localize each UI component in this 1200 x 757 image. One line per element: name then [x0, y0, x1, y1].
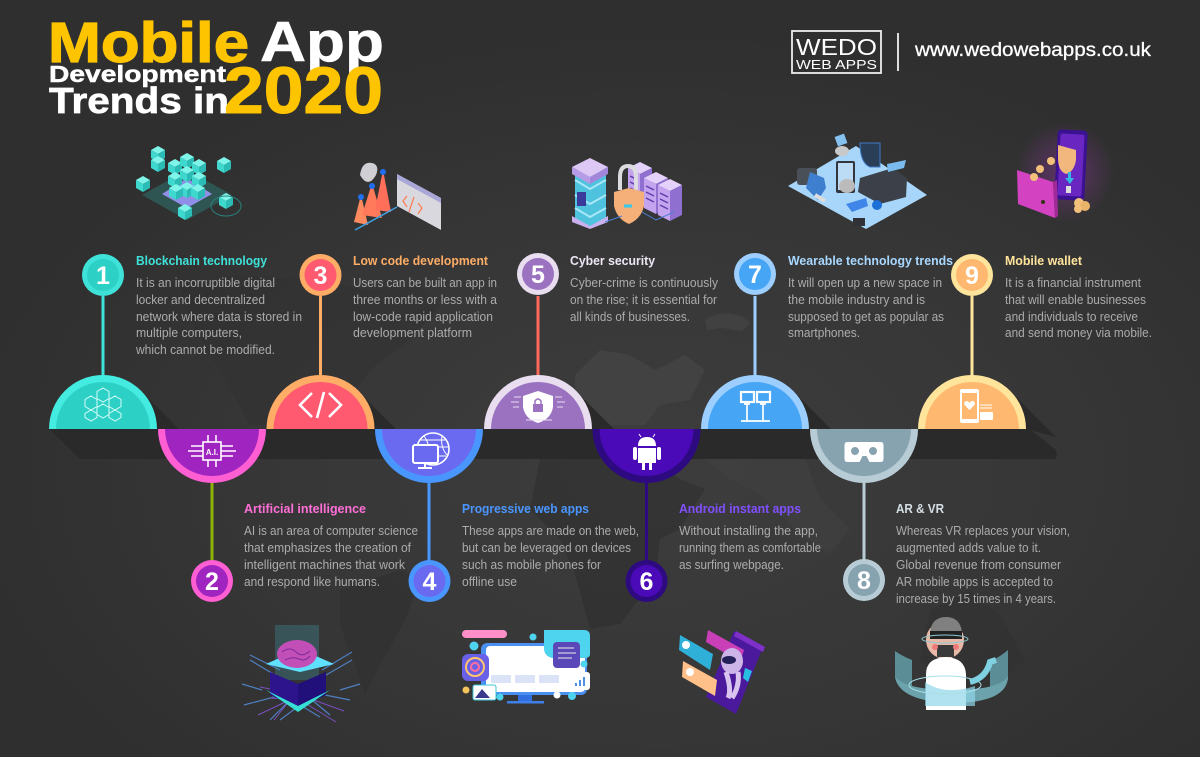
- number badge 5: 5: [531, 261, 545, 289]
- text: wearable technology: Wearable technology trends: [788, 253, 953, 268]
- number badge 3: [300, 254, 342, 296]
- text: artificial intelligence: [244, 501, 418, 589]
- number badge 7: [734, 253, 776, 295]
- text: android instant apps: [679, 501, 821, 572]
- text: blockchain: [135, 253, 302, 357]
- text: blockchain: Blockchain technology: [136, 253, 268, 268]
- text: progressive web apps: offline use: [462, 575, 517, 589]
- text: AR and VR: augmented adds value to it.: [896, 541, 1041, 555]
- illustration: AR VR man: [895, 617, 1008, 710]
- text: AR and VR: AR mobile apps is accepted to: [896, 575, 1053, 589]
- illustration: android chatbot phone: [679, 630, 765, 714]
- number badge 8: [843, 559, 885, 601]
- text: wearable technology: supposed to get as popular as: [788, 310, 944, 324]
- step 2: artificial intelligence: [158, 429, 418, 722]
- logo: We Do Web Apps: [792, 31, 881, 73]
- connector line 2: [210, 483, 214, 561]
- text: wearable technology: [788, 253, 953, 340]
- text: low code: low-code rapid application: [353, 310, 493, 324]
- step 8: AR and VR: [810, 429, 1070, 710]
- header divider: [897, 33, 899, 71]
- semicircle icon 1: [49, 375, 157, 429]
- step 7: wearable technology: [701, 134, 953, 429]
- text: artificial intelligence: that emphasizes the creation of: [244, 541, 412, 555]
- text: AR and VR: [896, 501, 1070, 606]
- text: cyber security: all kinds of businesses.: [570, 310, 690, 324]
- number badge 3: 3: [314, 262, 327, 290]
- connector line 8: [862, 483, 866, 561]
- text: progressive web apps: Progressive web apps: [462, 501, 589, 516]
- illustration: cyber security: [572, 158, 682, 229]
- semicircle icon 3: [266, 375, 374, 429]
- title: 2020: [224, 53, 383, 127]
- step 4: progressive web apps: [375, 429, 639, 704]
- world map: [180, 275, 1025, 695]
- text: low code: development platform: [353, 326, 472, 340]
- title: Mobile: [48, 11, 249, 75]
- text: android instant apps: as surfing webpage.: [679, 558, 784, 572]
- number badge 6: [626, 560, 668, 602]
- text: progressive web apps: [462, 501, 639, 589]
- number badge 8: 8: [857, 567, 871, 595]
- number badge 4: [408, 560, 450, 602]
- text: blockchain: network where data is stored in: [136, 310, 302, 324]
- text: low code: Users can be built an app in: [353, 276, 497, 290]
- semicircle icon 9: [918, 375, 1026, 429]
- semicircle icon 6: [592, 429, 700, 483]
- connector line 6: [645, 483, 648, 561]
- connector line 9: [970, 296, 974, 376]
- step 5: cyber security: [484, 158, 719, 429]
- text: cyber security: [570, 253, 719, 324]
- step 6: android instant apps: [592, 429, 821, 714]
- text: progressive web apps: such as mobile phones for: [462, 558, 601, 572]
- number badge 9: [951, 254, 993, 296]
- text: blockchain: It is an incorruptible digital: [136, 276, 275, 290]
- text: blockchain: locker and decentralized: [136, 293, 265, 307]
- semicircle icon 4: [375, 429, 483, 483]
- text: mobile wallet: It is a financial instrument: [1005, 276, 1141, 290]
- title: Trends in: [49, 80, 229, 121]
- logo: We Do Web Apps: WEDO: [796, 34, 877, 60]
- text: android instant apps: running them as comfortable: [679, 541, 821, 555]
- text: wearable technology: smartphones.: [788, 326, 860, 340]
- text: progressive web apps: but can be leveraged on devices: [462, 541, 631, 555]
- text: AR and VR: Whereas VR replaces your vision,: [896, 524, 1070, 538]
- logo: We Do Web Apps: WEB APPS: [796, 57, 877, 72]
- text: cyber security: Cyber-crime is continuously: [570, 276, 719, 290]
- text: cyber security: Cyber security: [570, 253, 656, 268]
- text: mobile wallet: [1005, 253, 1152, 340]
- illustration: AI brain chip: [242, 625, 360, 722]
- number badge 1: 1: [96, 262, 110, 290]
- semicircle icon 5: [484, 375, 592, 429]
- illustration: low code: [354, 163, 441, 230]
- timeline shadow band: [49, 391, 1057, 459]
- number badge 4: 4: [423, 568, 437, 596]
- text: mobile wallet: Mobile wallet: [1005, 253, 1083, 268]
- text: mobile wallet: and send money via mobile.: [1005, 326, 1152, 340]
- text: cyber security: on the rise; it is essential for: [570, 293, 717, 307]
- semicircle icon 7: [701, 375, 809, 429]
- text: artificial intelligence: Artificial intelligence: [244, 501, 366, 516]
- website url: www.wedowebapps.co.uk: [914, 40, 1152, 61]
- connector line 3: [319, 296, 322, 376]
- text: AR and VR: AR & VR: [896, 501, 945, 516]
- text: blockchain: which cannot be modified.: [135, 343, 275, 357]
- text: low code: [353, 253, 497, 340]
- number badge 2: 2: [205, 568, 219, 596]
- title: [48, 10, 384, 127]
- text: mobile wallet: and individuals to receive: [1005, 310, 1138, 324]
- text: blockchain: multiple computers,: [136, 326, 242, 340]
- text: progressive web apps: These apps are made on the web,: [462, 524, 639, 538]
- title: Development: [49, 61, 226, 87]
- text: AR and VR: Global revenue from consumer: [896, 558, 1061, 572]
- number badge 5: [517, 253, 559, 295]
- text: low code: Low code development: [353, 253, 489, 268]
- text: artificial intelligence: intelligent machines that work: [244, 558, 406, 572]
- number badge 1: [82, 254, 124, 296]
- connector line 1: [102, 296, 104, 376]
- text: mobile wallet: that will enable businesses: [1005, 293, 1146, 307]
- connector line 5: [536, 296, 540, 376]
- step 3: low code: [266, 163, 497, 429]
- text: artificial intelligence: AI is an area of computer science: [244, 524, 418, 538]
- number badge 9: 9: [965, 262, 979, 290]
- illustration: blockchain cubes: [136, 146, 241, 220]
- number badge 7: 7: [748, 261, 762, 289]
- text: android instant apps: Without installing the app,: [679, 524, 818, 538]
- illustration: wearable devices: [788, 134, 927, 229]
- text: wearable technology: It will open up a new space in: [788, 276, 942, 290]
- connector line 4: [428, 483, 430, 561]
- illustration: mobile wallet: [1015, 122, 1115, 222]
- semicircle icon 8: [810, 429, 918, 483]
- step 1: blockchain: [49, 146, 302, 429]
- text: AR and VR: increase by 15 times in 4 years.: [896, 592, 1056, 606]
- number badge 6: 6: [640, 568, 653, 596]
- number badge 2: [191, 560, 233, 602]
- text: wearable technology: the mobile industry and is: [788, 293, 925, 307]
- illustration: progressive web apps: [462, 630, 590, 704]
- connector line 7: [754, 296, 756, 376]
- text: artificial intelligence: and respond like humans.: [244, 575, 380, 589]
- title: App: [260, 10, 384, 74]
- text: low code: three months or less with a: [353, 293, 497, 307]
- text: android instant apps: Android instant apps: [679, 501, 801, 516]
- step 9: mobile wallet: [918, 122, 1152, 429]
- semicircle icon 2: [158, 429, 266, 483]
- semicircle icon 2: A.I.: [206, 448, 218, 457]
